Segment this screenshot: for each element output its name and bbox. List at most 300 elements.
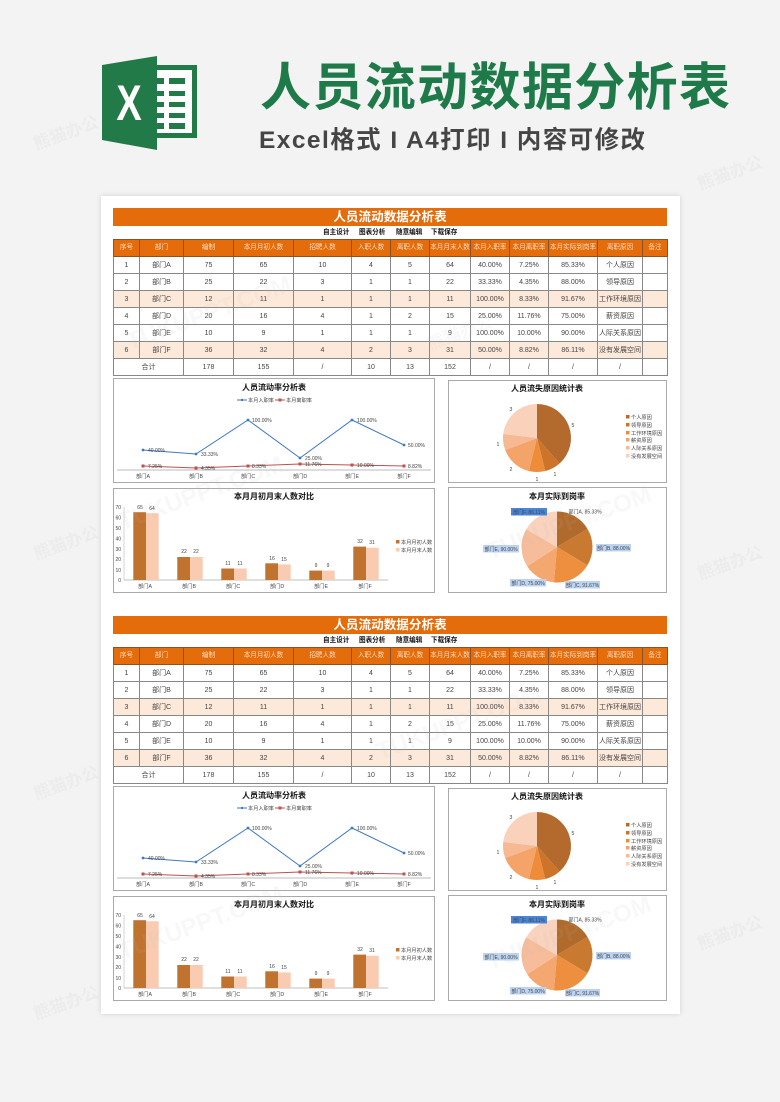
data table: / bbox=[322, 364, 323, 370]
watermark layer: 熊猫办公 bbox=[31, 982, 101, 1024]
data table: 部门 bbox=[155, 652, 168, 659]
data table: 1 bbox=[408, 296, 412, 302]
data table: 12 bbox=[205, 296, 212, 302]
pie chart: attrition reasons: 工作环境原因 bbox=[631, 837, 662, 845]
bar chart: headcount comparison: 9 bbox=[315, 971, 318, 977]
line chart: turnover rate bbox=[113, 786, 435, 891]
pie chart: attrition reasons bbox=[448, 380, 667, 483]
bar chart: headcount comparison: 65 bbox=[137, 913, 143, 919]
bar chart: headcount comparison: 本月月初人数 bbox=[401, 946, 433, 954]
data table: 招聘人数 bbox=[309, 244, 336, 251]
data table: 5 bbox=[408, 262, 412, 268]
bar chart: headcount comparison: 31 bbox=[369, 948, 375, 954]
line chart: turnover rate: 11.76% bbox=[305, 870, 322, 876]
data table: 88.00% bbox=[561, 278, 585, 286]
pie chart: attrition reasons: 1 bbox=[554, 880, 557, 886]
bar chart: headcount comparison: 0 bbox=[118, 986, 121, 992]
line chart: turnover rate: 部门C bbox=[241, 472, 255, 480]
feature line: 下载保存 bbox=[431, 637, 457, 644]
data table bbox=[113, 239, 668, 376]
data table: 8.33% bbox=[519, 296, 539, 302]
data table: 7.25% bbox=[519, 670, 539, 676]
data table: 本月月末人数 bbox=[430, 652, 470, 659]
data table: / bbox=[619, 364, 621, 370]
bar chart: headcount comparison: 本月月末人数 bbox=[401, 954, 433, 962]
line chart: turnover rate: 100.00% bbox=[357, 418, 377, 424]
pie chart: attrition reasons: 领导原因 bbox=[631, 829, 652, 837]
data table: 75 bbox=[205, 262, 212, 268]
pie chart: actual attendance rate: 部门A, 85.33% bbox=[568, 916, 602, 924]
header: logo and titles bbox=[102, 56, 730, 154]
data table: 15 bbox=[446, 312, 454, 320]
pie chart: attrition reasons: 3 bbox=[510, 407, 513, 413]
data table: 本月离职率 bbox=[513, 244, 545, 251]
data table: 155 bbox=[258, 772, 269, 778]
data table: / bbox=[528, 772, 530, 778]
data table: 90.00% bbox=[561, 330, 585, 336]
data table: 36 bbox=[205, 346, 212, 354]
data table: 8.82% bbox=[519, 754, 539, 762]
line chart: turnover rate: 11.76% bbox=[305, 462, 322, 468]
data table: 155 bbox=[258, 364, 269, 370]
data table: 1 bbox=[125, 670, 128, 676]
watermark overlay: TUKUPPT.COM bbox=[373, 681, 545, 766]
data table: 20 bbox=[205, 312, 212, 320]
data table: 2 bbox=[408, 720, 412, 728]
line chart: turnover rate: 10.00% bbox=[357, 463, 375, 469]
bar chart: headcount comparison: 本月月末人数 bbox=[401, 546, 433, 554]
data table: 5 bbox=[125, 738, 128, 744]
data table: 领导原因 bbox=[606, 278, 634, 286]
data table: 本月入职率 bbox=[474, 652, 506, 659]
bar chart: headcount comparison: 10 bbox=[115, 976, 121, 982]
data table: 本月实际到岗率 bbox=[550, 244, 596, 251]
data table: 16 bbox=[260, 312, 267, 320]
pie chart: actual attendance rate: 部门C, 91.67% bbox=[566, 582, 600, 589]
data table: 5 bbox=[125, 330, 128, 336]
feature line: 下载保存 bbox=[431, 229, 457, 236]
data table: 部门D bbox=[152, 312, 171, 320]
data table: 1 bbox=[369, 704, 373, 710]
bar chart: headcount comparison: 40 bbox=[115, 536, 121, 542]
line chart: turnover rate: 33.33% bbox=[201, 452, 219, 458]
data table: 1 bbox=[321, 296, 324, 302]
line chart: turnover rate: 部门A bbox=[136, 472, 150, 480]
data table: / bbox=[489, 364, 491, 370]
data table: 薪资原因 bbox=[606, 720, 634, 728]
bar chart: headcount comparison: 22 bbox=[193, 957, 199, 963]
data table: 2 bbox=[125, 686, 128, 694]
data table: 86.11% bbox=[561, 754, 585, 762]
sheet title bar: 人员流动数据分析表 bbox=[333, 618, 447, 632]
data table: 100.00% bbox=[476, 704, 504, 710]
line chart: turnover rate: 部门B bbox=[189, 880, 203, 888]
data table: 25 bbox=[205, 686, 212, 694]
line chart: turnover rate: 部门B bbox=[189, 472, 203, 480]
data table: 部门B bbox=[152, 686, 171, 694]
line chart: turnover rate: 25.00% bbox=[305, 864, 323, 870]
bar chart: headcount comparison: 31 bbox=[369, 540, 375, 546]
bar chart: headcount comparison: 部门A bbox=[138, 990, 152, 998]
data table: 75.00% bbox=[561, 720, 585, 728]
sheet title bar: 人员流动数据分析表 bbox=[333, 210, 447, 224]
pie chart: attrition reasons: 2 bbox=[510, 467, 513, 473]
main title: 人员流动数据分析表 bbox=[260, 59, 730, 116]
pie chart: actual attendance rate: 部门E, 90.00% bbox=[484, 954, 518, 961]
line chart: turnover rate: 部门E bbox=[345, 880, 359, 888]
data table: 4 bbox=[321, 754, 324, 762]
line chart: turnover rate: 33.33% bbox=[201, 860, 219, 866]
pie chart: attrition reasons: 个人原因 bbox=[631, 414, 652, 421]
bar chart: headcount comparison: 22 bbox=[181, 957, 187, 963]
data table: 100.00% bbox=[476, 296, 504, 302]
bar chart: headcount comparison: 32 bbox=[357, 947, 363, 953]
data table: 33.33% bbox=[478, 278, 502, 286]
line chart: turnover rate: 4.35% bbox=[201, 874, 216, 880]
data table: 本月离职率 bbox=[513, 652, 545, 659]
line chart: turnover rate: 8.82% bbox=[408, 464, 423, 470]
pie chart: attrition reasons: 人际关系原因 bbox=[631, 852, 662, 860]
bar chart: headcount comparison: 20 bbox=[115, 965, 121, 971]
feature line bbox=[323, 228, 458, 236]
data table: 22 bbox=[260, 686, 267, 694]
data table: 4 bbox=[321, 720, 324, 728]
data table: 50.00% bbox=[478, 346, 502, 354]
watermark layer: 熊猫办公 bbox=[695, 542, 765, 584]
bar chart: headcount comparison bbox=[113, 896, 435, 1001]
panel: white sheet background bbox=[101, 196, 680, 1014]
bar chart: headcount comparison: 16 bbox=[269, 556, 275, 562]
data table: / bbox=[619, 772, 621, 778]
data table: 9 bbox=[262, 738, 265, 744]
data table: 32 bbox=[260, 346, 267, 354]
data table: / bbox=[322, 772, 323, 778]
data table: 编制 bbox=[202, 244, 215, 251]
feature line: 自主设计 bbox=[323, 229, 349, 236]
line chart: turnover rate: 4.35% bbox=[201, 466, 216, 472]
pie chart: attrition reasons bbox=[448, 788, 667, 891]
watermark overlay: TUKUPPT.COM bbox=[483, 481, 655, 566]
data table: 离职人数 bbox=[397, 652, 423, 659]
line chart: turnover rate: 本月离职率 bbox=[286, 396, 312, 404]
line chart: turnover rate bbox=[113, 378, 435, 483]
bar chart: headcount comparison: 部门D bbox=[270, 990, 284, 998]
feature line: 图表分析 bbox=[359, 637, 385, 644]
data table: / bbox=[489, 772, 491, 778]
data table: 20 bbox=[205, 720, 212, 728]
data table: 11 bbox=[260, 704, 267, 710]
bar chart: headcount comparison: 30 bbox=[115, 955, 121, 961]
data table: 1 bbox=[369, 296, 373, 302]
bar chart: headcount comparison: 本月月初人数 bbox=[401, 538, 433, 546]
pie chart: actual attendance rate: 部门D, 75.00% bbox=[511, 988, 545, 995]
bar chart: headcount comparison: 22 bbox=[181, 549, 187, 555]
data table: 91.67% bbox=[561, 296, 585, 302]
data table: 领导原因 bbox=[606, 686, 634, 694]
data table: 2 bbox=[369, 754, 373, 762]
data table: 编制 bbox=[202, 652, 215, 659]
watermark layer: 熊猫办公 bbox=[31, 762, 101, 804]
data table: 4 bbox=[125, 312, 128, 320]
bar chart: headcount comparison: 本月月初月末人数对比 bbox=[234, 899, 314, 909]
bar chart: headcount comparison: 70 bbox=[115, 505, 121, 511]
data table: 部门E bbox=[152, 330, 171, 336]
bar chart: headcount comparison: 50 bbox=[115, 934, 121, 940]
pie chart: attrition reasons: 个人原因 bbox=[631, 822, 652, 829]
data table: 部门C bbox=[152, 704, 171, 710]
feature line: 自主设计 bbox=[323, 637, 349, 644]
line chart: turnover rate: 本月入职率 bbox=[248, 396, 274, 404]
watermark layer: 熊猫办公 bbox=[31, 522, 101, 564]
bar chart: headcount comparison: 部门F bbox=[358, 582, 372, 590]
data table: 本月月末人数 bbox=[430, 244, 470, 251]
bar chart: headcount comparison: 11 bbox=[237, 561, 243, 567]
data table: 1 bbox=[369, 330, 373, 336]
bar chart: headcount comparison: 65 bbox=[137, 505, 143, 511]
data table: 86.11% bbox=[561, 346, 585, 354]
data table: 64 bbox=[446, 262, 454, 268]
data table bbox=[113, 647, 668, 784]
watermark overlay: TUKUPPT.COM bbox=[123, 271, 295, 356]
bar chart: headcount comparison: 64 bbox=[149, 914, 155, 920]
pie chart: actual attendance rate: 本月实际到岗率 bbox=[529, 899, 585, 909]
data table: 2 bbox=[408, 312, 412, 320]
data table: 没有发展空间 bbox=[599, 754, 641, 762]
data table: 4 bbox=[369, 262, 373, 268]
data table: 10 bbox=[205, 738, 212, 744]
line chart: turnover rate: 25.00% bbox=[305, 456, 323, 462]
pie chart: actual attendance rate bbox=[448, 487, 667, 593]
data table: 入职人数 bbox=[358, 652, 384, 659]
data table: 4 bbox=[321, 312, 324, 320]
data table: 25.00% bbox=[478, 720, 502, 728]
data table: 9 bbox=[262, 330, 265, 336]
data table: 40.00% bbox=[478, 262, 502, 268]
line chart: turnover rate: 40.00% bbox=[148, 448, 166, 454]
data table: 3 bbox=[125, 704, 128, 710]
bar chart: headcount comparison: 16 bbox=[269, 964, 275, 970]
data table: 10.00% bbox=[517, 738, 541, 744]
data table: 31 bbox=[446, 346, 454, 354]
data table: 10.00% bbox=[517, 330, 541, 336]
pie chart: actual attendance rate: 部门D, 75.00% bbox=[511, 580, 545, 587]
data table: 11 bbox=[446, 704, 454, 710]
data table: 1 bbox=[369, 312, 373, 320]
data table: 3 bbox=[408, 346, 412, 354]
data table: 8.33% bbox=[519, 704, 539, 710]
data table: 65 bbox=[260, 670, 267, 676]
data table: 10 bbox=[319, 670, 326, 676]
data table: 75 bbox=[205, 670, 212, 676]
watermark overlay: TUKUPPT.COM bbox=[115, 451, 287, 536]
bar chart: headcount comparison: 70 bbox=[115, 913, 121, 919]
feature line: 随意编辑 bbox=[396, 229, 422, 236]
bar chart: headcount comparison: 64 bbox=[149, 506, 155, 512]
line chart: turnover rate: 40.00% bbox=[148, 856, 166, 862]
bar chart: headcount comparison: 部门C bbox=[226, 990, 240, 998]
data table: 工作环境原因 bbox=[599, 296, 641, 302]
line chart: turnover rate: 100.00% bbox=[252, 418, 272, 424]
data table: 合计 bbox=[142, 364, 156, 370]
data table: 人际关系原因 bbox=[599, 738, 641, 744]
bar chart: headcount comparison: 11 bbox=[225, 561, 231, 567]
data table: 部门C bbox=[152, 296, 171, 302]
data table: 招聘人数 bbox=[309, 652, 336, 659]
pie chart: attrition reasons: 3 bbox=[510, 815, 513, 821]
bar chart: headcount comparison: 60 bbox=[115, 516, 121, 522]
data table: 11.76% bbox=[517, 720, 541, 728]
data table: 备注 bbox=[648, 244, 662, 251]
data table: 部门A bbox=[152, 262, 171, 268]
pie chart: attrition reasons: 2 bbox=[510, 875, 513, 881]
data table: 50.00% bbox=[478, 754, 502, 762]
data table: 离职原因 bbox=[607, 244, 633, 251]
line chart: turnover rate: 部门E bbox=[345, 472, 359, 480]
icon: Excel logo: X bbox=[116, 76, 142, 131]
line chart: turnover rate: 7.25% bbox=[148, 872, 163, 878]
data table: 4 bbox=[321, 346, 324, 354]
data table: 6 bbox=[125, 754, 128, 762]
data table: 90.00% bbox=[561, 738, 585, 744]
data table: 2 bbox=[125, 278, 128, 286]
line chart: turnover rate: 8.33% bbox=[252, 872, 267, 878]
pie chart: attrition reasons: 人际关系原因 bbox=[631, 444, 662, 452]
data table: 1 bbox=[369, 686, 373, 694]
data table: 1 bbox=[125, 262, 128, 268]
bar chart: headcount comparison: 9 bbox=[315, 563, 318, 569]
bar chart: headcount comparison: 20 bbox=[115, 557, 121, 563]
bar chart: headcount comparison: 22 bbox=[193, 549, 199, 555]
pie chart: actual attendance rate: 本月实际到岗率 bbox=[529, 491, 585, 501]
pie chart: attrition reasons: 领导原因 bbox=[631, 421, 652, 429]
data table: 部门 bbox=[155, 244, 168, 251]
line chart: turnover rate: 人员流动率分析表 bbox=[242, 382, 306, 392]
data table: 本月月初人数 bbox=[244, 652, 283, 659]
pie chart: attrition reasons: 5 bbox=[572, 831, 575, 837]
data table: 人际关系原因 bbox=[599, 330, 641, 336]
pie chart: attrition reasons: 1 bbox=[536, 477, 539, 483]
data table: 100.00% bbox=[476, 738, 504, 744]
data table: 8.82% bbox=[519, 346, 539, 354]
data table: 178 bbox=[203, 364, 214, 370]
watermark overlay: TUKUPPT.COM bbox=[115, 881, 287, 966]
data table: 离职原因 bbox=[607, 652, 633, 659]
data table: 10 bbox=[205, 330, 212, 336]
watermark layer: 熊猫办公 bbox=[695, 912, 765, 954]
data table: 部门E bbox=[152, 738, 171, 744]
bar chart: headcount comparison: 60 bbox=[115, 924, 121, 930]
data table: 11 bbox=[446, 296, 454, 302]
bar chart: headcount comparison: 10 bbox=[115, 568, 121, 574]
data table: 个人原因 bbox=[606, 670, 634, 676]
bar chart: headcount comparison: 15 bbox=[281, 557, 287, 563]
pie chart: attrition reasons: 工作环境原因 bbox=[631, 429, 662, 437]
line chart: turnover rate: 部门D bbox=[293, 472, 307, 480]
data table: 1 bbox=[321, 330, 324, 336]
bar chart: headcount comparison: 40 bbox=[115, 944, 121, 950]
data table: 6 bbox=[125, 346, 128, 354]
pie chart: attrition reasons: 1 bbox=[497, 442, 500, 448]
line chart: turnover rate: 部门F bbox=[397, 472, 411, 480]
watermark overlay: 熊猫办公 bbox=[425, 312, 495, 354]
pie chart: actual attendance rate: 部门A, 85.33% bbox=[568, 508, 602, 516]
bar chart: headcount comparison: 部门D bbox=[270, 582, 284, 590]
data table: / bbox=[572, 772, 574, 778]
data table: 部门F bbox=[152, 754, 171, 762]
data table: 本月实际到岗率 bbox=[550, 652, 596, 659]
pie chart: attrition reasons: 没有发展空间 bbox=[631, 452, 662, 460]
bar chart: headcount comparison: 30 bbox=[115, 547, 121, 553]
data table: 备注 bbox=[648, 652, 662, 659]
data table: 1 bbox=[408, 278, 412, 286]
data table: 10 bbox=[367, 364, 375, 370]
data table: 9 bbox=[448, 330, 452, 336]
data table: 152 bbox=[444, 364, 456, 370]
bar chart: headcount comparison: 本月月初月末人数对比 bbox=[234, 491, 314, 501]
data table: 91.67% bbox=[561, 704, 585, 710]
data table: / bbox=[572, 364, 574, 370]
line chart: turnover rate: 50.00% bbox=[408, 443, 426, 449]
data table: 11.76% bbox=[517, 312, 541, 320]
data table: 离职人数 bbox=[397, 244, 423, 251]
data table: 10 bbox=[367, 772, 375, 778]
pie chart: attrition reasons: 薪资原因 bbox=[631, 436, 652, 444]
line chart: turnover rate: 7.25% bbox=[148, 464, 163, 470]
data table: 22 bbox=[446, 278, 454, 286]
line chart: turnover rate: 人员流动率分析表 bbox=[242, 790, 306, 800]
data table: 1 bbox=[408, 738, 412, 744]
data table: 1 bbox=[369, 720, 373, 728]
data table: 9 bbox=[448, 738, 452, 744]
pie chart: attrition reasons: 薪资原因 bbox=[631, 844, 652, 852]
feature line: 图表分析 bbox=[359, 229, 385, 236]
bar chart: headcount comparison: 9 bbox=[327, 563, 330, 569]
watermark layer: 熊猫办公 bbox=[31, 112, 101, 154]
data table: 3 bbox=[408, 754, 412, 762]
data table: 152 bbox=[444, 772, 456, 778]
data table: 178 bbox=[203, 772, 214, 778]
line chart: turnover rate: 本月离职率 bbox=[286, 804, 312, 812]
data table: 40.00% bbox=[478, 670, 502, 676]
data table: 100.00% bbox=[476, 330, 504, 336]
data table: 1 bbox=[321, 738, 324, 744]
data table: 25.00% bbox=[478, 312, 502, 320]
pie chart: attrition reasons: 1 bbox=[536, 885, 539, 891]
pie chart: actual attendance rate: 部门C, 91.67% bbox=[566, 990, 600, 997]
pie chart: actual attendance rate: 部门F, 86.11% bbox=[513, 509, 545, 516]
data table: 本月月初人数 bbox=[244, 244, 283, 251]
pie chart: attrition reasons: 人员流失原因统计表 bbox=[511, 383, 583, 393]
pie chart: actual attendance rate: 部门B, 88.00% bbox=[597, 545, 631, 552]
pie chart: attrition reasons: 人员流失原因统计表 bbox=[511, 791, 583, 801]
line chart: turnover rate: 10.00% bbox=[357, 871, 375, 877]
line chart: turnover rate: 8.33% bbox=[252, 464, 267, 470]
data table: 个人原因 bbox=[606, 262, 634, 268]
line chart: turnover rate: 部门F bbox=[397, 880, 411, 888]
data table: 3 bbox=[125, 296, 128, 302]
data table: 88.00% bbox=[561, 686, 585, 694]
data table: 1 bbox=[321, 704, 324, 710]
data table: 入职人数 bbox=[358, 244, 384, 251]
sheet title bar bbox=[113, 208, 667, 226]
data table: 13 bbox=[406, 772, 414, 778]
data table: 25 bbox=[205, 278, 212, 286]
data table: 5 bbox=[408, 670, 412, 676]
data table: 32 bbox=[260, 754, 267, 762]
data table: 12 bbox=[205, 704, 212, 710]
data table: 4 bbox=[125, 720, 128, 728]
data table: 85.33% bbox=[561, 262, 585, 268]
